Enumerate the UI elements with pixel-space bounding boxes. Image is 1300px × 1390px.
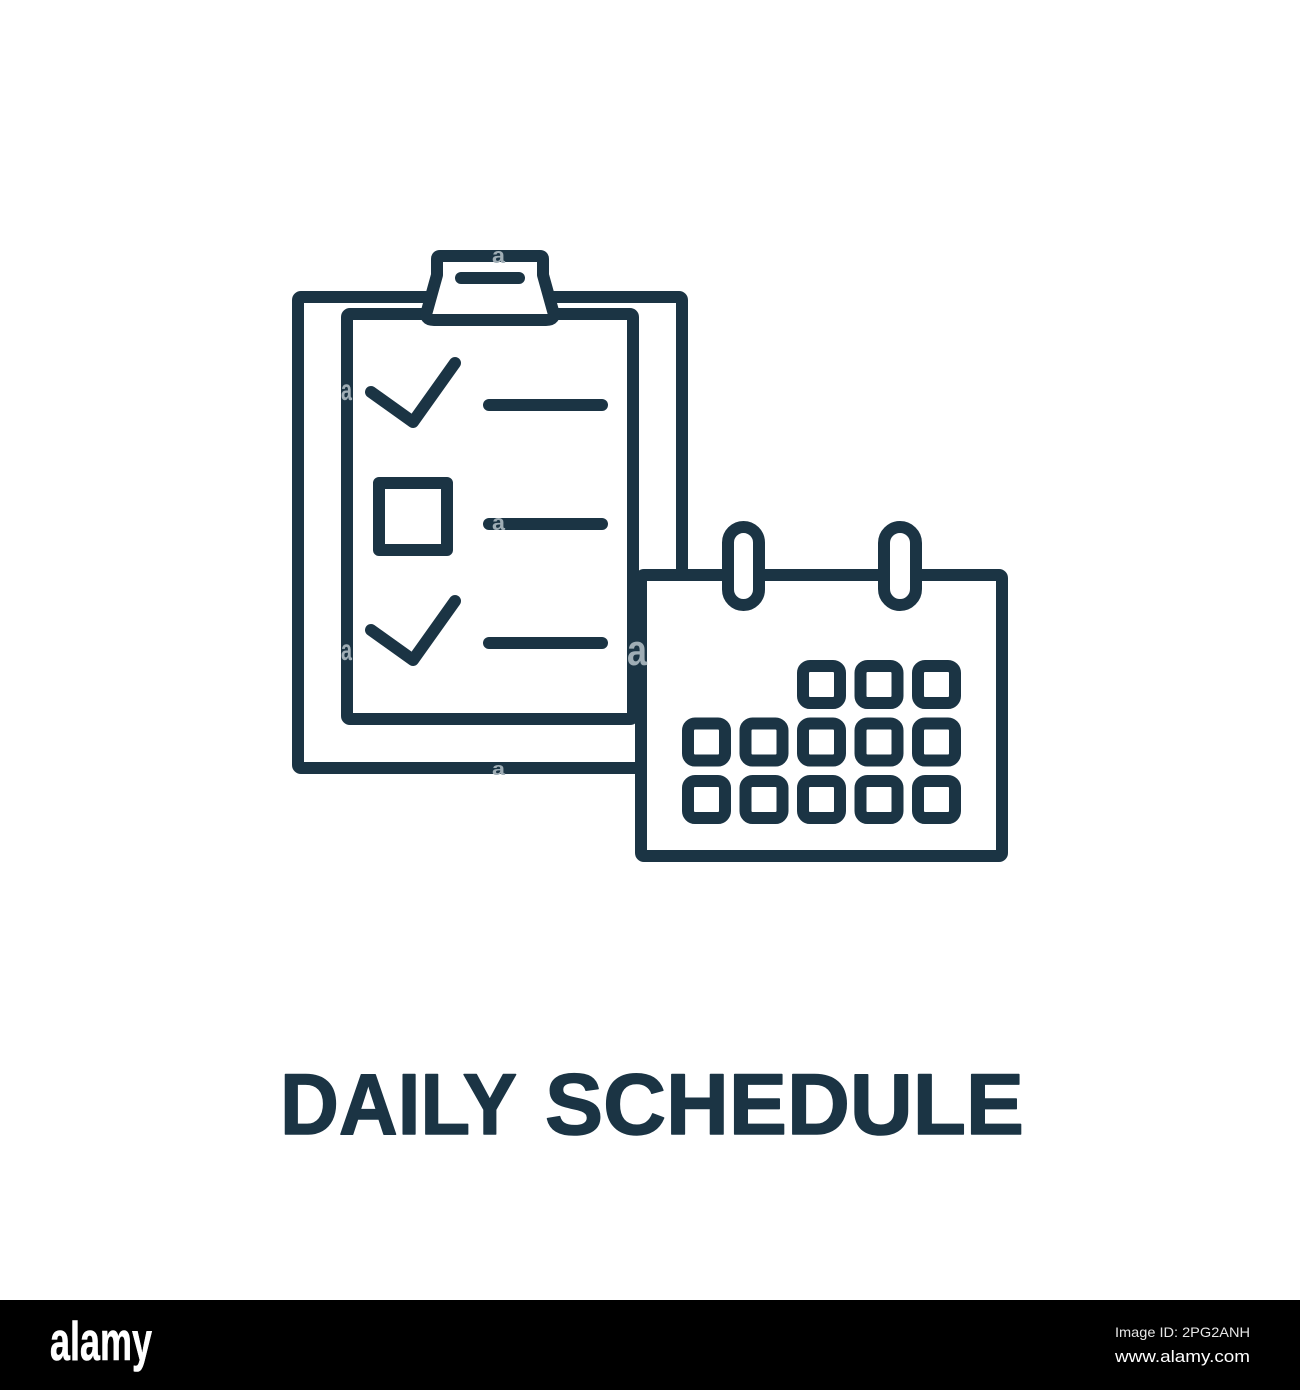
calendar day grid <box>688 666 955 818</box>
checklist item 2: line <box>489 518 602 530</box>
clipboard paper sheet <box>347 314 633 719</box>
calendar body <box>641 575 1002 856</box>
clipboard back board <box>298 297 682 768</box>
icon: clipboard with checklist <box>298 256 682 768</box>
checklist item 3: checkmark <box>371 601 455 660</box>
icon: wall calendar <box>641 527 1002 856</box>
watermark letters: a <box>492 243 506 268</box>
calendar binder ring right <box>884 527 916 605</box>
watermark letters: a <box>492 510 506 535</box>
checklist item 2: empty checkbox <box>379 483 447 550</box>
watermark letters: a <box>341 634 352 667</box>
footer website: www.alamy.com <box>1114 1347 1250 1366</box>
checklist item 1: checkmark <box>371 363 455 422</box>
watermark letters: a <box>627 626 647 675</box>
title: SCHEDULE <box>545 1057 1024 1153</box>
watermark letters: a <box>492 759 506 779</box>
footer image id: Image ID: 2PG2ANH <box>1115 1324 1250 1340</box>
checklist item 3: line <box>489 637 602 649</box>
watermark letters: a <box>341 374 352 407</box>
clipboard clip <box>426 256 554 320</box>
footer logo: alamy <box>50 1310 152 1372</box>
title: DAILY <box>280 1057 517 1153</box>
footer bar <box>0 1300 1300 1390</box>
calendar binder ring left <box>728 527 759 605</box>
checklist item 1: line <box>489 399 602 411</box>
watermark letters <box>341 243 647 779</box>
